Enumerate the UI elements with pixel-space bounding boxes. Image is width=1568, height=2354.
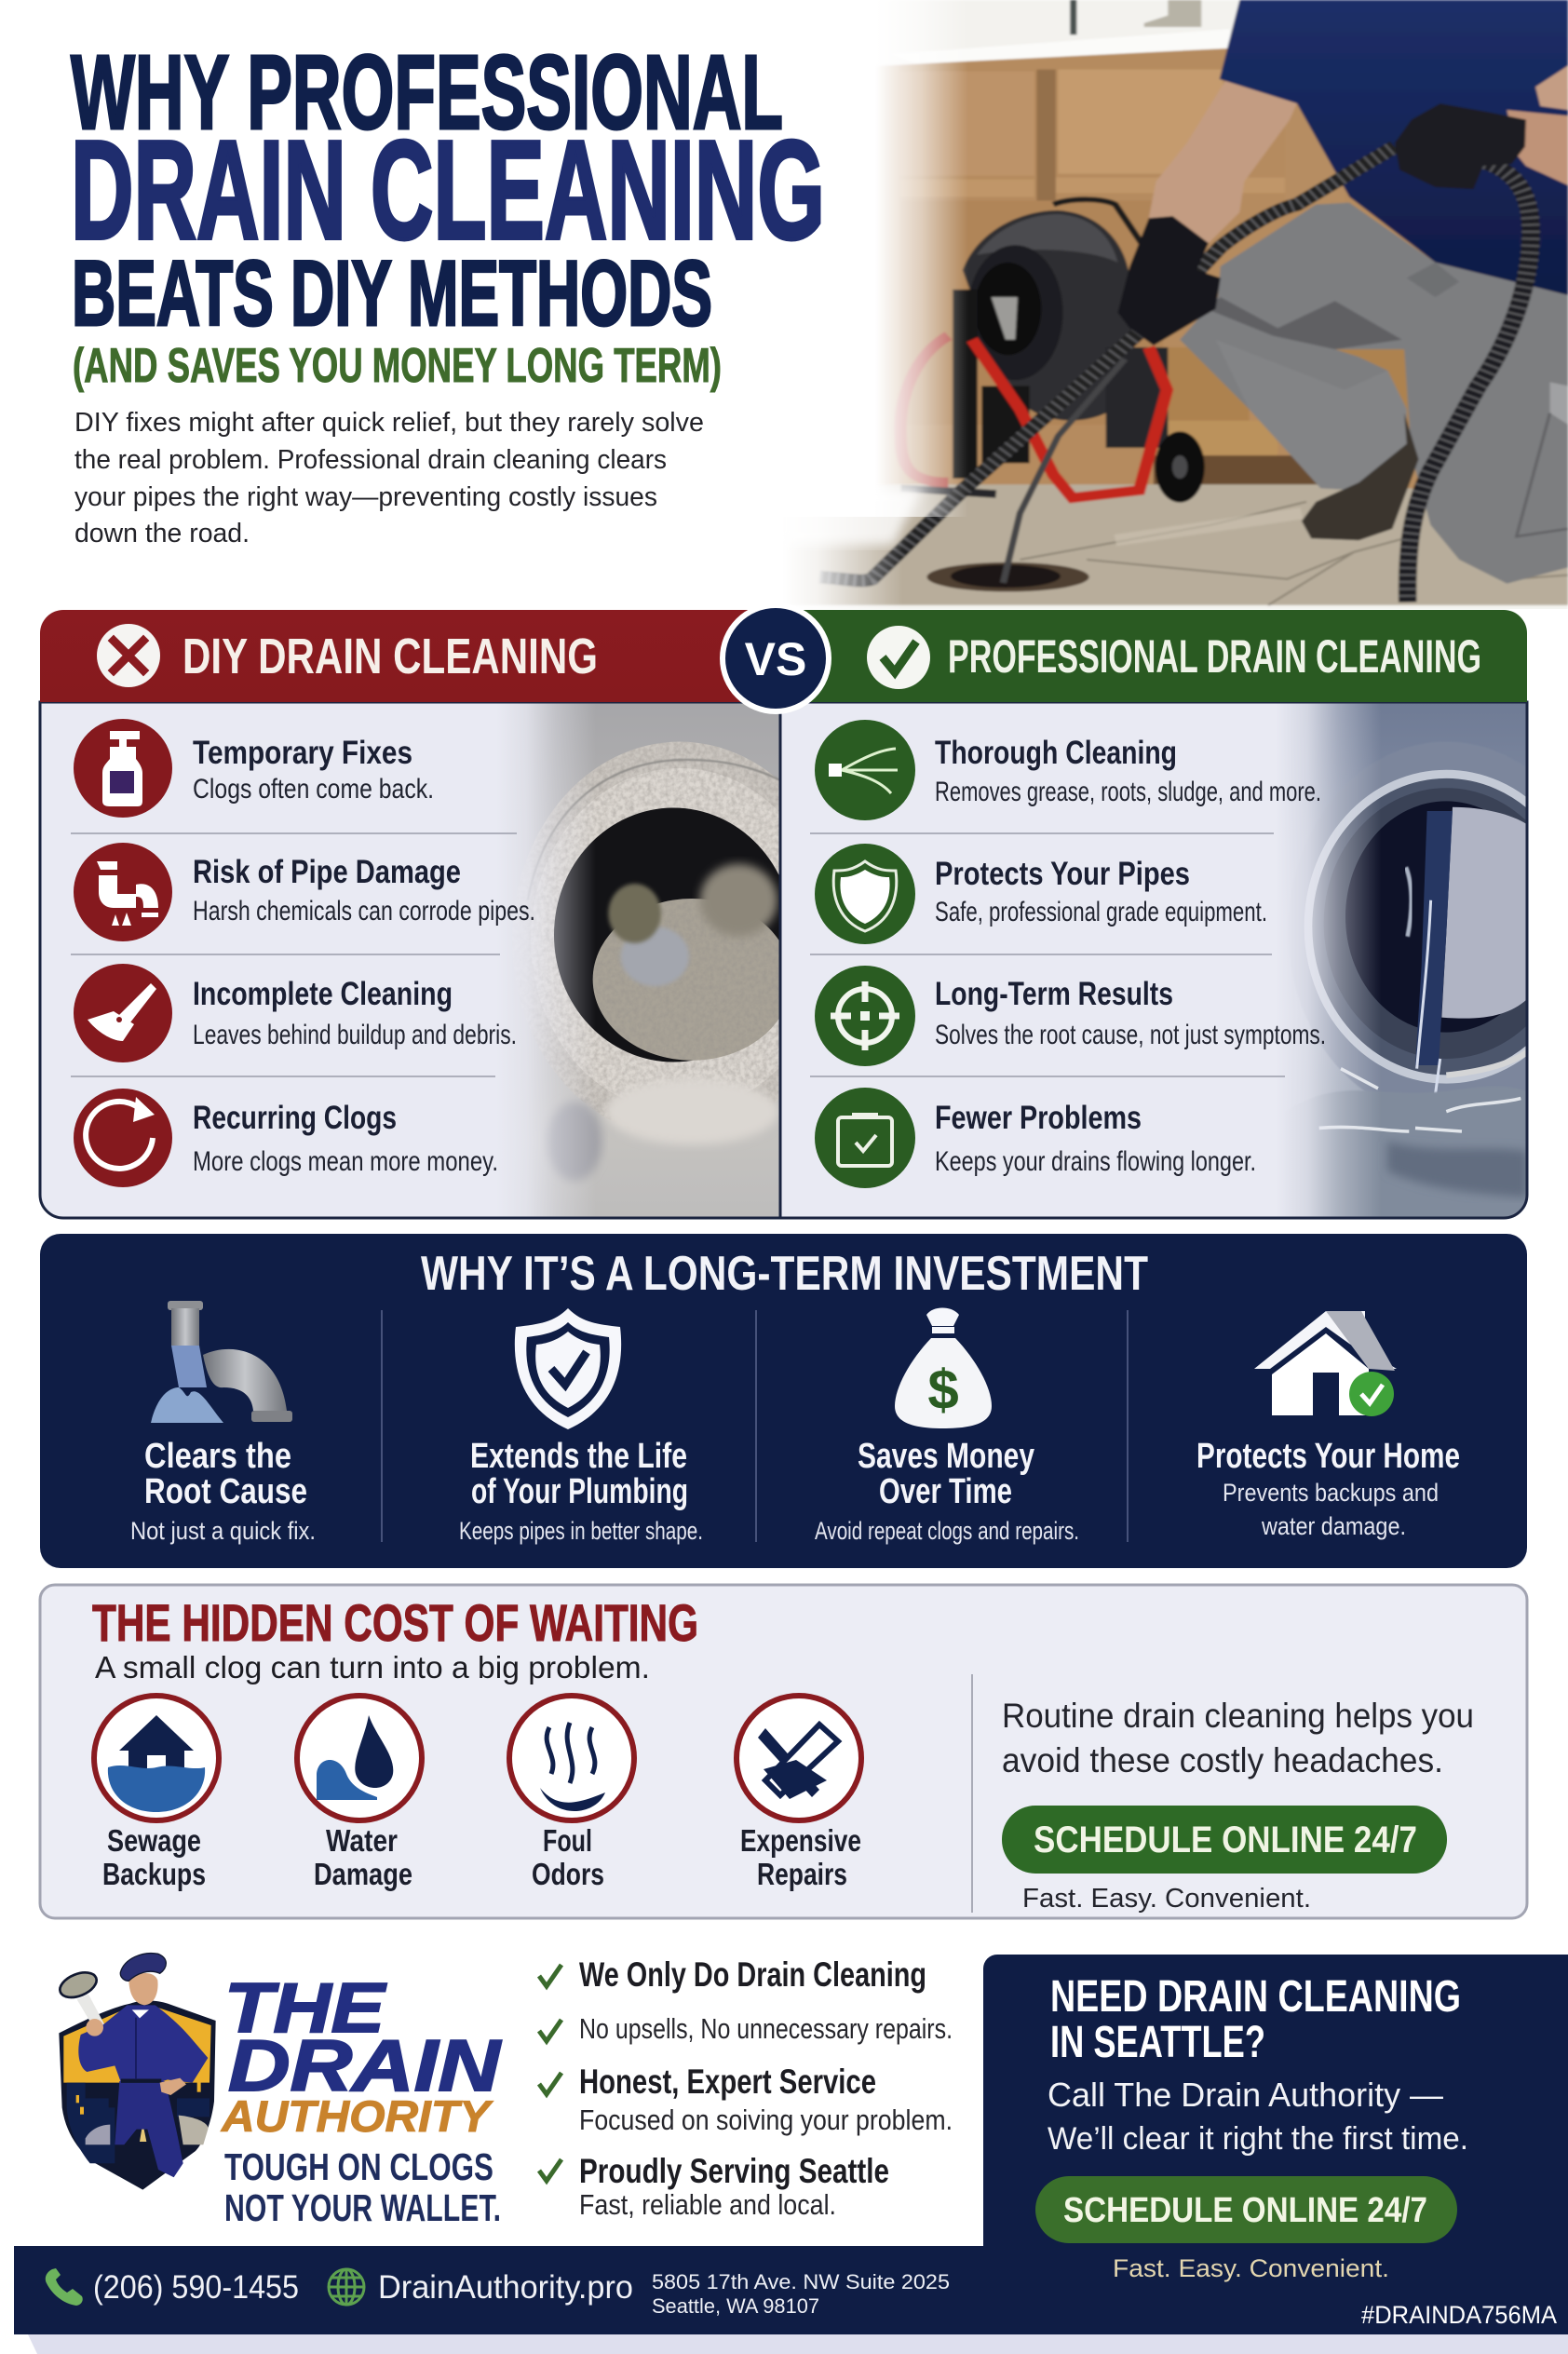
campaign code: #DRAINDA756MA — [1361, 2301, 1557, 2329]
button: schedule online: SCHEDULE ONLINE 24/7 — [1034, 1820, 1417, 1860]
panel: hidden cost of waiting — [40, 1585, 1527, 1918]
item: recurring clogs: Recurring Clogs — [193, 1100, 397, 1136]
phone number: (206) 590-1455 — [93, 2269, 299, 2306]
boot — [1302, 413, 1419, 540]
icon: X — [97, 624, 160, 687]
plunger — [77, 1995, 115, 2049]
icon: house with check — [1254, 1311, 1397, 1416]
button: schedule online — [1035, 2176, 1457, 2243]
item: expensive repairs: Expensive — [740, 1823, 861, 1858]
photo: clean flowing pipe — [1288, 704, 1525, 1216]
intro paragraph: the real problem. Professional drain cleaning clears — [74, 445, 667, 475]
wordmark: DRAIN: DRAIN — [228, 2024, 502, 2106]
title — [71, 34, 825, 393]
professional list — [810, 720, 1326, 1188]
icon: check — [867, 626, 930, 689]
item: incomplete cleaning: Leaves behind buildup and debris. — [193, 1020, 517, 1050]
wordmark: THE: THE — [224, 1968, 386, 2047]
intro paragraph: down the road. — [74, 519, 250, 548]
address — [652, 2270, 950, 2318]
intro paragraph — [74, 408, 704, 548]
checklist: Focused on soiving your problem. — [579, 2104, 953, 2136]
item: protects your pipes: Safe, professional grade equipment. — [935, 897, 1267, 927]
item: sewage backups — [94, 1696, 219, 1891]
item: water damage — [297, 1696, 422, 1891]
callout text: Routine drain cleaning helps you — [1002, 1697, 1474, 1735]
item: fewer problems — [815, 1088, 1256, 1188]
contact bar — [14, 2246, 1568, 2334]
panel: DIY body — [40, 702, 847, 1220]
checklist — [539, 1955, 953, 2221]
column: extends the life: Extends the Life — [470, 1437, 687, 1476]
heading: WHY IT’S A LONG-TERM INVESTMENT — [421, 1247, 1148, 1301]
button: schedule online: SCHEDULE ONLINE 24/7 — [1063, 2191, 1427, 2230]
address: 5805 17th Ave. NW Suite 2025 — [652, 2270, 950, 2293]
item: thorough cleaning — [815, 720, 1321, 820]
website: DrainAuthority.pro — [378, 2269, 633, 2306]
item: recurring clogs — [74, 1089, 498, 1187]
header: DIY — [40, 610, 780, 702]
uniform — [78, 2005, 208, 2083]
panel outline — [40, 702, 1527, 1218]
column: protects your home: water damage. — [1261, 1512, 1406, 1540]
item: foul odors: Odors — [532, 1857, 604, 1891]
column: saves money: Saves Money — [858, 1437, 1034, 1476]
column: clears the root cause: Not just a quick fix. — [130, 1517, 316, 1545]
checklist: Proudly Serving Seattle — [579, 2152, 889, 2190]
item: sewage backups: Sewage — [107, 1823, 201, 1858]
address: Seattle, WA 98107 — [652, 2294, 819, 2318]
tagline: Fast. Easy. Convenient. — [1022, 1884, 1311, 1914]
column: protects your home: Protects Your Home — [1196, 1437, 1460, 1476]
face and cap — [128, 1973, 158, 2005]
check marks — [539, 1965, 561, 2181]
icon: phone — [46, 2268, 83, 2306]
column: clears the root cause — [130, 1301, 316, 1545]
subheading: A small clog can turn into a big problem. — [95, 1650, 650, 1684]
heading: THE HIDDEN COST OF WAITING — [92, 1593, 698, 1652]
item: incomplete cleaning — [74, 964, 517, 1062]
panel: call to action: IN SEATTLE? — [1050, 2018, 1265, 2067]
CTA tagline: Fast. Easy. Convenient. — [1113, 2254, 1389, 2282]
column: saves money: Avoid repeat clogs and repairs. — [815, 1517, 1079, 1545]
item: temporary fixes: Temporary Fixes — [193, 735, 412, 771]
title line 1: WHY PROFESSIONAL — [71, 34, 783, 151]
column: saves money — [815, 1307, 1079, 1545]
item: water damage: Damage — [314, 1857, 412, 1891]
column: saves money: Over Time — [879, 1472, 1012, 1511]
panel: call to action: We’ll clear it right the first time. — [1048, 2121, 1468, 2157]
tagline: TOUGH ON CLOGS — [224, 2145, 493, 2188]
callout text: avoid these costly headaches. — [1002, 1741, 1443, 1779]
item: water damage: Water — [326, 1823, 398, 1858]
column: protects your home: Prevents backups and — [1223, 1479, 1439, 1507]
pants — [1180, 203, 1568, 584]
item: expensive repairs: Repairs — [757, 1857, 847, 1891]
gloves — [1117, 216, 1221, 345]
column: clears the root cause: Clears the — [144, 1437, 291, 1476]
item: risk of pipe damage — [74, 843, 535, 941]
panel: DIY vs professional comparison — [40, 602, 1568, 1220]
photo: clogged drain — [515, 704, 778, 1216]
floor — [781, 484, 1568, 605]
subtitle: (AND SAVES YOU MONEY LONG TERM) — [73, 339, 722, 393]
item: long-term results: Long-Term Results — [935, 976, 1173, 1012]
cables — [819, 147, 1395, 581]
shirt — [1220, 0, 1568, 295]
checklist: We Only Do Drain Cleaning — [579, 1955, 926, 1994]
logo: The Drain Authority — [56, 1954, 502, 2229]
item: temporary fixes: Clogs often come back. — [193, 774, 434, 805]
right upper arm and forearm — [1535, 65, 1568, 110]
floor drain — [926, 562, 1089, 591]
item: protects your pipes: Protects Your Pipes — [935, 856, 1190, 892]
hands — [86, 2019, 103, 2036]
title line 3: BEATS DIY METHODS — [72, 241, 712, 345]
item: incomplete cleaning: Incomplete Cleaning — [193, 976, 453, 1012]
item: risk of pipe damage: Harsh chemicals can corrode pipes. — [193, 896, 535, 927]
column: clears the root cause: Root Cause — [144, 1472, 307, 1511]
item: thorough cleaning: Removes grease, roots, sludge, and more. — [935, 777, 1321, 807]
callout text — [1002, 1697, 1474, 1779]
VS badge: VS — [745, 633, 806, 685]
left arm — [1149, 81, 1297, 243]
button: schedule online — [1002, 1806, 1447, 1874]
title line 2: DRAIN CLEANING — [71, 111, 825, 268]
item: long-term results: Solves the root cause, not just symptoms. — [935, 1020, 1326, 1050]
item: foul odors: Foul — [543, 1823, 592, 1858]
checklist: Fast, reliable and local. — [579, 2188, 836, 2221]
icon: globe — [329, 2269, 364, 2305]
header: professional — [780, 610, 1527, 702]
item: foul odors — [509, 1696, 634, 1891]
CTA text: Call The Drain Authority — — [1048, 2076, 1443, 2114]
column: protects your home — [1196, 1311, 1460, 1540]
DIY list — [71, 719, 535, 1187]
checklist: Honest, Expert Service — [579, 2063, 876, 2101]
icon: shield with check — [515, 1308, 621, 1429]
item: fewer problems: Fewer Problems — [935, 1100, 1142, 1136]
item: fewer problems: Keeps your drains flowing longer. — [935, 1146, 1256, 1177]
item: temporary fixes — [74, 719, 434, 818]
item: expensive repairs — [737, 1696, 861, 1891]
hero photo: technician cleaning a floor drain — [781, 0, 1568, 610]
item: long-term results — [815, 966, 1326, 1066]
panel: call to action — [983, 1955, 1568, 2334]
column: extends the life: of Your Plumbing — [471, 1472, 688, 1511]
item: protects your pipes — [815, 844, 1267, 944]
panel: long-term investment — [40, 1234, 1527, 1568]
wordmark: AUTHORITY: AUTHORITY — [221, 2091, 493, 2141]
icon: pipe — [151, 1301, 292, 1423]
VS badge — [720, 602, 831, 714]
item: sewage backups: Backups — [102, 1857, 206, 1891]
heading: DIY drain cleaning: DIY DRAIN CLEANING — [182, 629, 598, 684]
column: extends the life: Keeps pipes in better shape. — [459, 1517, 703, 1545]
item: recurring clogs: More clogs mean more money. — [193, 1146, 498, 1177]
drain cleaning machine — [900, 199, 1205, 503]
icon: money bag: $ — [927, 1359, 959, 1421]
item: thorough cleaning: Thorough Cleaning — [935, 735, 1177, 771]
footer strip — [28, 2334, 1568, 2354]
logo mascot — [56, 1954, 216, 2190]
icon: money bag — [895, 1307, 992, 1428]
logo: The Drain Authority: NOT YOUR WALLET. — [224, 2186, 501, 2229]
panel: professional body — [780, 702, 1568, 1220]
intro paragraph: DIY fixes might after quick relief, but they rarely solve — [74, 408, 704, 438]
cabinets — [867, 48, 1568, 502]
CTA heading: NEED DRAIN CLEANING — [1050, 1972, 1461, 2022]
item: risk of pipe damage: Risk of Pipe Damage — [193, 854, 461, 890]
checklist: No upsells, No unnecessary repairs. — [579, 2012, 953, 2045]
column: extends the life — [459, 1308, 703, 1545]
intro paragraph: your pipes the right way—preventing costly issues — [74, 482, 657, 512]
